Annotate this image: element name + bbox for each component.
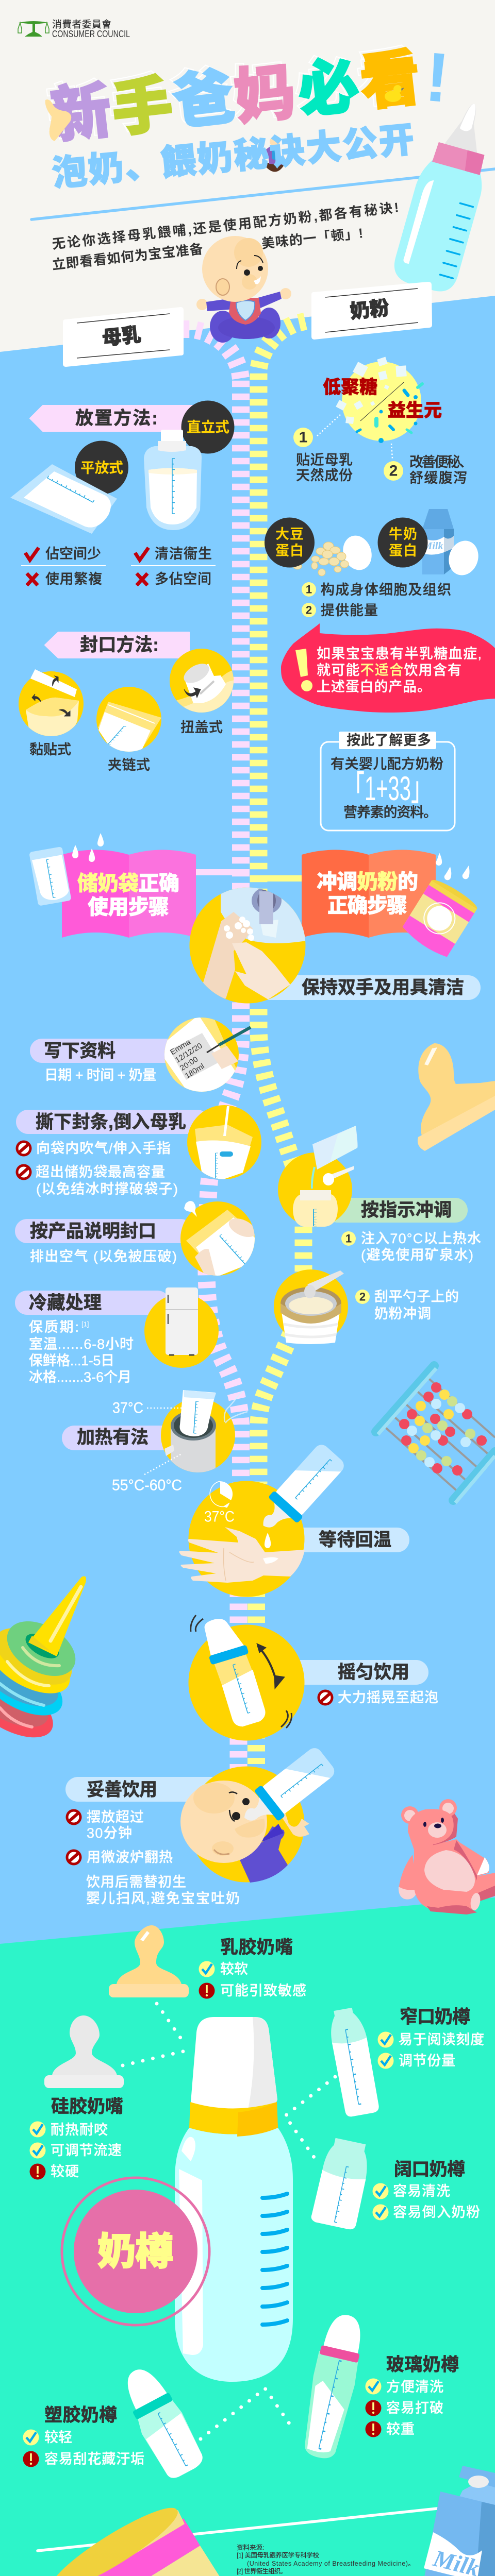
callout: galactosemia warning: 就可能不适合饮用含有 [317, 663, 461, 678]
step: label the bag: 12/12/20 [174, 1041, 204, 1065]
text: shelf life: 冰格.......3-6个月 [29, 1369, 131, 1385]
text: latex nipple: 可能引致敏感 [220, 1983, 306, 1998]
benefit 2: 改善便秘、 [409, 454, 473, 470]
badge: 奶樽 [62, 2178, 209, 2325]
text: silicone nipple [30, 2097, 123, 2179]
pill: 摇匀饮用: 摇匀饮用 [338, 1662, 409, 1683]
text: silicone nipple: 较硬 [51, 2164, 79, 2179]
zipper: pink track [183, 320, 250, 1770]
title ghost outlines: 妈 [227, 56, 295, 130]
step: test on wrist [179, 1440, 349, 1597]
list: storage pros and cons: 清洁衞生 [155, 546, 212, 562]
title ghost outlines: 手 [104, 67, 172, 141]
decoration: abacus [376, 1366, 495, 1503]
big bottle: centre [175, 2017, 293, 2382]
list: protein functions: 2 [306, 604, 312, 616]
callout: galactosemia warning [281, 623, 495, 713]
step: pour milk [187, 1105, 261, 1182]
card: 奶粉 [311, 282, 432, 340]
intro text: 立即看看如何为宝宝准备 [51, 241, 204, 273]
warnings: feeding: 婴儿扫风,避免宝宝吐奶 [86, 1891, 240, 1906]
badge: 大豆蛋白 [265, 517, 315, 568]
text: latex nipple: 较软 [220, 1961, 248, 1977]
step: warmer [161, 1390, 248, 1477]
big bottle: header [390, 95, 495, 296]
pill: 保持双手及用具清洁: 保持双手及用具清洁 [302, 978, 464, 997]
item: narrow-neck bottle [326, 2006, 380, 2117]
step: test on wrist: 37°C [204, 1509, 235, 1525]
icon: formula can with drops [400, 853, 480, 959]
warnings: pouring [15, 1141, 178, 1197]
instruction 1: hot water [341, 1231, 481, 1263]
text: sources [237, 2544, 415, 2575]
badge: 直立式 [182, 401, 234, 453]
decoration: large nipple [418, 1043, 495, 1151]
pill: 撕下封条: 撕下封条,倒入母乳 [36, 1112, 186, 1132]
icon: milk bag with drops [29, 833, 104, 906]
text: plastic bottle [23, 2405, 144, 2467]
instruction 2: scoop: 刮平勺子上的 [374, 1289, 459, 1304]
text: plastic bottle: 较轻 [44, 2430, 72, 2445]
label: 55–60°C warmer temperature: 55°C-60°C [112, 1477, 182, 1494]
text: latex nipple: 乳胶奶嘴 [220, 1937, 293, 1958]
text: sources: (United States Academy of Breastfeeding Medicine)。 [247, 2560, 415, 2567]
text: shelf life: 保质期: [29, 1319, 79, 1335]
baby: header mascot [196, 236, 291, 343]
instruction 1: hot water: (避免使用矿泉水) [361, 1247, 473, 1263]
warnings: pouring: (以免结冰时撑破袋子) [36, 1181, 178, 1197]
list: protein functions: 提供能量 [321, 603, 378, 618]
benefit 2: 2 [389, 463, 398, 479]
text: narrow-neck bottle [377, 2006, 484, 2069]
step: label the bag [164, 1018, 252, 1092]
text: glass bottle: 较重 [386, 2421, 415, 2437]
benefit 1: 1 [299, 429, 307, 446]
callout: galactosemia warning: 上述蛋白的产品。 [317, 679, 431, 694]
pill: 冷藏处理: 冷藏处理 [29, 1293, 102, 1313]
text: glass bottle [365, 2354, 459, 2437]
card: 母乳: 母乳 [101, 324, 142, 350]
step: wash hands [190, 887, 309, 1005]
title: main heading: 必 [294, 52, 362, 126]
benefit 2 [384, 444, 473, 486]
book: 储奶袋正确使用步骤: 使用步骤 [88, 896, 169, 919]
text: glass bottle: 方便清洗 [386, 2379, 443, 2395]
badge: 牛奶蛋白: 蛋白 [389, 543, 417, 558]
title: main heading: 妈 [231, 58, 299, 132]
text: wide-neck bottle: 阔口奶樽 [394, 2160, 465, 2179]
badge: 平放式 [75, 441, 128, 495]
tag: 放置方法: 放置方法: [75, 408, 158, 429]
badge: 大豆蛋白: 大豆 [275, 527, 304, 542]
label: 55–60°C warmer temperature [112, 1454, 182, 1494]
decoration: teddy bear [399, 1799, 495, 1914]
tag: 放置方法 [30, 405, 196, 431]
pill: 保持双手及用具清洁 [258, 975, 481, 1000]
panel: 低聚糖 / 益生元: 低聚糖 [323, 377, 377, 398]
label: 扭盖式: 扭盖式 [180, 720, 223, 735]
title ghost outlines: 爸 [166, 60, 234, 134]
text: latex nipple [199, 1937, 306, 1999]
tag: 封口方法 [45, 632, 189, 658]
list: protein functions: 1 [306, 583, 312, 596]
step: level scoop [274, 1269, 348, 1344]
footer rule [38, 2509, 437, 2551]
icon: adhesive seal [19, 669, 84, 742]
logo: Consumer Council: 消費者委員會 [52, 19, 111, 30]
label: 37°C water temperature [112, 1399, 182, 1417]
instruction 1: hot water: 注入70°C以上热水 [361, 1231, 481, 1246]
warnings: feeding: 用微波炉翻热 [87, 1850, 173, 1865]
icon: milk carton [422, 509, 483, 579]
badge: 牛奶蛋白 [377, 517, 428, 568]
pill: 加热有法 [62, 1426, 175, 1450]
pill: 写下资料: 写下资料 [44, 1041, 116, 1061]
dotted connectors [123, 2004, 335, 2439]
step: add water [278, 1126, 358, 1227]
title: main heading [43, 38, 452, 151]
panel: 低聚糖 / 益生元: 益生元 [388, 401, 442, 420]
pill: 按产品说明封口 [15, 1219, 193, 1243]
list: storage pros and cons [21, 546, 216, 587]
callout: galactosemia warning: 如果宝宝患有半乳糖血症, [317, 646, 482, 662]
warnings: feeding: 饮用后需替初生 [86, 1874, 186, 1890]
decoration: formula can [51, 2508, 236, 2576]
instruction 2: scoop: 奶粉冲调 [374, 1306, 431, 1321]
decoration: milk carton [420, 2466, 495, 2576]
icon: twist cap [170, 649, 234, 713]
instruction 1: hot water: 1 [345, 1232, 352, 1245]
list: protein functions: 构成身体细胞及组织 [321, 582, 451, 598]
pill: 按产品说明封口: 按产品说明封口 [30, 1221, 156, 1242]
text: sources: [2] 世界衞生组织。 [237, 2568, 287, 2575]
background: green section [0, 1897, 495, 2576]
title: main heading: 新 [47, 77, 115, 151]
item: plastic bottle [114, 2360, 208, 2483]
zipper: yellow track [250, 313, 307, 1764]
box: 1+33 nutrients link: 「1+33」 [344, 769, 432, 807]
text: silicone nipple: 可调节流速 [51, 2143, 122, 2158]
box: 1+33 nutrients link: 按此了解更多 [346, 733, 431, 748]
pill: 等待回温: 等待回温 [319, 1530, 391, 1550]
item: glass bottle [296, 2311, 370, 2462]
icon: eggs and beans [293, 532, 376, 576]
benefit 2: 舒缓腹泻 [409, 470, 467, 486]
step: refrigerate [144, 1287, 219, 1368]
step: shake [189, 1613, 304, 1740]
step: label the bag: 20:00 [178, 1055, 200, 1073]
list: storage pros and cons: 使用繁複 [45, 571, 102, 587]
tag: 封口方法: 封口方法: [80, 635, 159, 655]
list: storage pros and cons: 多佔空间 [155, 571, 211, 587]
text: label contents: 日期 + 时间 + 奶量 [44, 1067, 156, 1083]
book: 冲调奶粉的正确步骤: 正确步骤 [327, 894, 407, 917]
subtitle: 泡奶、餵奶秘诀大公开 [50, 120, 416, 194]
warning: shake: 大力摇晃至起泡 [338, 1690, 438, 1705]
item: silicone nipple [44, 2015, 124, 2088]
intro text: 无论你选择母乳餵哺,还是使用配方奶粉,都各有秘诀! [51, 199, 400, 252]
pill: 等待回温 [289, 1528, 409, 1552]
step: feeding [180, 1743, 339, 1883]
warnings: pouring: 向袋内吹气/伸入手指 [36, 1141, 171, 1156]
text: shelf life: 室温......6-8小时 [29, 1336, 134, 1352]
title ghost outlines: 必 [290, 49, 358, 123]
text: silicone nipple: 硅胶奶嘴 [51, 2097, 123, 2116]
pill: 写下资料 [30, 1039, 179, 1063]
box: 1+33 nutrients link [321, 732, 455, 831]
badge: 大豆蛋白: 蛋白 [275, 543, 304, 558]
book: 储奶袋正确使用步骤: 储奶袋正确 [77, 872, 179, 895]
icon: milk carton: Milk [423, 540, 443, 552]
clock [210, 1481, 233, 1507]
warnings: pouring: 超出储奶袋最高容量 [36, 1164, 165, 1180]
title: main heading: 看 [356, 44, 424, 118]
logo: Consumer Council [18, 19, 130, 39]
title ghost outlines: 新 [43, 74, 111, 148]
title ghost outlines [43, 41, 420, 148]
warnings: feeding: 30分钟 [87, 1825, 132, 1841]
text: glass bottle: 玻璃奶樽 [386, 2354, 459, 2375]
text: shelf life [29, 1319, 134, 1385]
icon: rubber duck [385, 85, 404, 102]
pill: 按指示冲调 [325, 1198, 468, 1223]
benefit 1 [293, 414, 353, 483]
card: 奶粉: 奶粉 [349, 297, 390, 323]
title: main heading: ! [422, 38, 452, 117]
icon: nipple on title [45, 99, 71, 141]
text: shelf life: 保鲜格...1-5日 [29, 1353, 114, 1368]
label: 37°C water temperature: 37°C [112, 1399, 143, 1417]
box: 1+33 nutrients link: 营养素的资料。 [343, 805, 437, 820]
illustration: standing bag [144, 430, 202, 530]
text: glass bottle: 容易打破 [386, 2400, 443, 2416]
icon: rocking horse baby [265, 137, 284, 172]
intro text: 美味的一「顿」! [260, 225, 364, 251]
step: label the bag: Emma [169, 1038, 193, 1057]
warnings: feeding [66, 1809, 240, 1906]
card: 母乳 [63, 307, 184, 367]
item: wide-neck bottle [310, 2137, 373, 2230]
list: protein functions [302, 582, 451, 618]
text: expel air: 排出空气 (以免被压破) [30, 1249, 177, 1264]
text: silicone nipple: 耐热耐咬 [51, 2122, 108, 2138]
pill: 按指示冲调: 按指示冲调 [361, 1200, 452, 1220]
text: wide-neck bottle: 容易清洗 [393, 2183, 450, 2199]
badge: 直立式: 直立式 [187, 419, 229, 435]
text: wide-neck bottle: 容易倒入奶粉 [393, 2205, 480, 2220]
text: sources: [1] 美国母乳餵养医学专科学校 [237, 2551, 319, 2559]
step: label the bag: 180ml [184, 1062, 206, 1080]
label: 夹链式: 夹链式 [108, 757, 150, 773]
step: expel air and seal [180, 1201, 259, 1278]
badge: 牛奶蛋白: 牛奶 [389, 527, 417, 542]
label: 黏贴式: 黏贴式 [29, 742, 71, 757]
benefit 1: 天然成份 [296, 468, 353, 483]
pill: 撕下封条 [16, 1110, 209, 1134]
title ghost outlines: 看 [352, 41, 420, 115]
text: narrow-neck bottle: 易于阅读刻度 [399, 2032, 484, 2047]
pill: 妥善饮用: 妥善饮用 [87, 1780, 157, 1800]
instruction 2: scoop [355, 1289, 459, 1321]
benefit 1: 贴近母乳 [296, 452, 353, 468]
background: blue section [0, 296, 495, 1958]
title: main heading: 手 [108, 70, 176, 144]
instruction 2: scoop: 2 [359, 1290, 366, 1303]
item: latex nipple [109, 1925, 189, 1997]
text: narrow-neck bottle: 窄口奶樽 [400, 2006, 470, 2027]
list: storage pros and cons: 佔空间少 [45, 546, 101, 562]
badge: 平放式: 平放式 [80, 460, 123, 476]
decoration: ring stacker [0, 1576, 86, 1750]
pill: 摇匀饮用 [289, 1660, 428, 1685]
panel: 低聚糖 / 益生元 [323, 357, 442, 443]
text: sources: 资料来源: [237, 2544, 264, 2551]
pill: 冷藏处理 [15, 1291, 170, 1315]
text: shelf life: [1] [81, 1320, 89, 1328]
book: 冲调奶粉的正确步骤 [302, 850, 436, 938]
probiotics [357, 384, 422, 433]
pill: 妥善饮用 [65, 1777, 236, 1802]
rule under subtitle [31, 169, 495, 219]
sugar cubes [336, 357, 407, 424]
book: 冲调奶粉的正确步骤: 冲调奶粉的 [317, 871, 418, 893]
book: 储奶袋正确使用步骤 [62, 850, 196, 938]
box: 1+33 nutrients link: 有关婴儿配方奶粉 [331, 756, 443, 772]
illustration: flat bag [10, 464, 117, 534]
text: plastic bottle: 塑胶奶樽 [44, 2405, 117, 2426]
text: wide-neck bottle [372, 2160, 480, 2221]
title: main heading: 爸 [170, 63, 238, 137]
warnings: feeding: 摆放超过 [87, 1809, 144, 1825]
text: plastic bottle: 容易刮花藏汙垢 [44, 2451, 144, 2467]
logo: Consumer Council: CONSUMER COUNCIL [52, 29, 130, 39]
icon: zip seal [96, 687, 161, 752]
text: narrow-neck bottle: 调节份量 [399, 2053, 455, 2069]
badge: 奶樽: 奶樽 [97, 2230, 173, 2273]
pill: 加热有法: 加热有法 [77, 1427, 148, 1448]
